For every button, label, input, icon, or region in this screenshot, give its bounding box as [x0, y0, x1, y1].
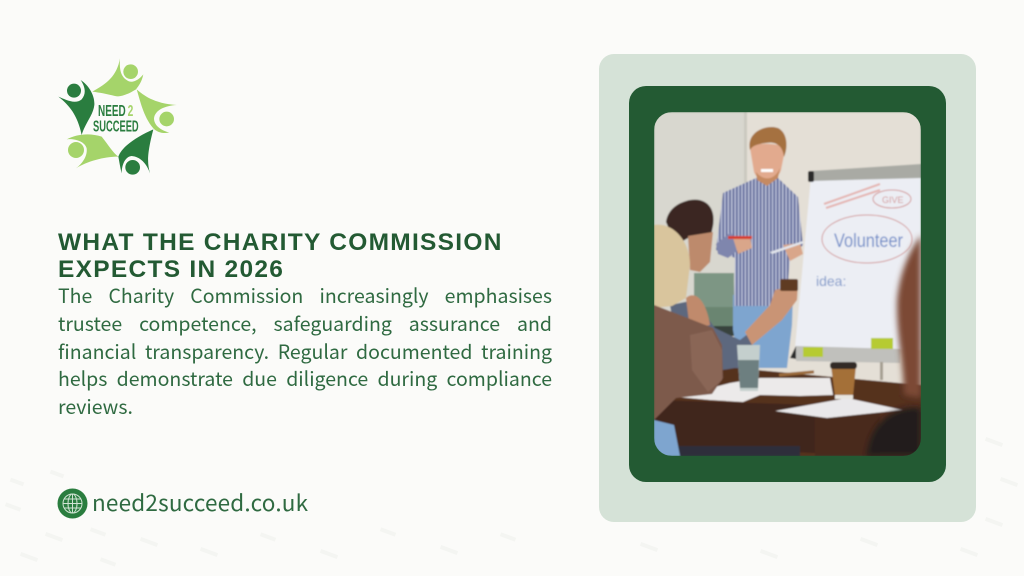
coffee cup — [831, 366, 856, 396]
heading: EXPECTS IN 2026 — [58, 256, 284, 283]
heading — [58, 229, 503, 283]
logo: Need 2 Succeed — [58, 58, 176, 175]
figure: top light green — [92, 58, 143, 96]
icon: globe — [58, 488, 88, 518]
glass — [737, 345, 760, 391]
foreground blurred shapes — [866, 235, 921, 456]
seated man — [666, 200, 798, 374]
figure: left dark green — [58, 80, 94, 135]
body text — [58, 280, 552, 420]
green cabinet — [694, 273, 734, 307]
body text: helps demonstrate due diligence during compliance — [58, 363, 552, 392]
flipchart — [790, 164, 921, 380]
body text: financial transparency. Regular documented training — [58, 336, 552, 365]
body text: reviews. — [58, 391, 133, 420]
flipchart: GIVE — [882, 195, 904, 205]
figure: right light green — [137, 89, 177, 133]
flipchart: idea: — [816, 273, 846, 289]
panel: pale green card — [599, 54, 976, 522]
website url: need2succeed.co.uk — [92, 486, 308, 518]
table — [672, 368, 921, 456]
logo wordmark — [93, 103, 139, 136]
body text: The Charity Commission increasingly emphasises — [58, 280, 552, 309]
flipchart: Volunteer — [834, 231, 904, 252]
body text: trustee competence, safeguarding assurance and — [58, 308, 552, 337]
figure: bottom left light green — [67, 134, 118, 168]
presenter — [716, 127, 804, 368]
logo wordmark: SUCCEED — [93, 119, 139, 136]
photo: presenter at flipchart — [654, 112, 921, 456]
blonde woman — [654, 225, 723, 420]
heading: WHAT THE CHARITY COMMISSION — [58, 229, 503, 256]
figure: bottom right dark green — [118, 129, 153, 175]
papers — [677, 378, 833, 402]
panel: dark green frame — [629, 86, 946, 482]
logo wordmark: 2 — [128, 103, 133, 120]
wall — [746, 112, 921, 386]
logo wordmark: NEED — [98, 103, 126, 120]
